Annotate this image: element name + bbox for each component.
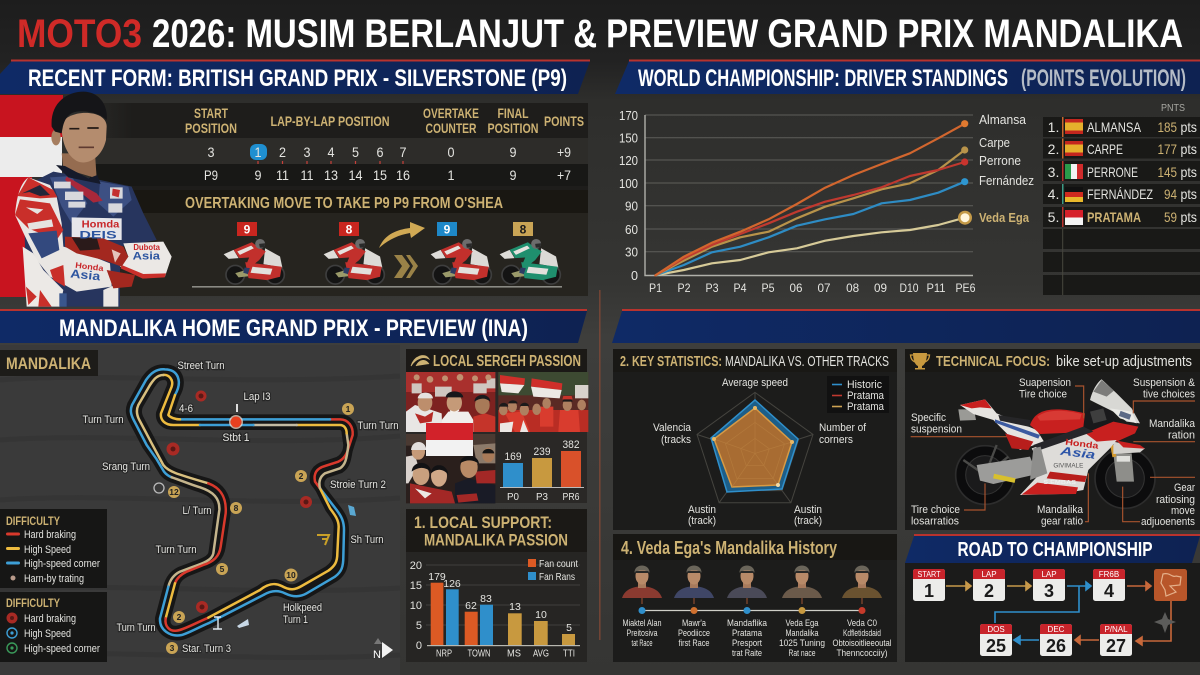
table headers: OVERTAKE: [423, 105, 479, 121]
overtaking heading: OVERTAKING MOVE TO TAKE P9 P9 FROM O'SHEA: [185, 195, 503, 212]
callout labels: Tire choice: [1019, 388, 1067, 400]
line chart: points evolution: P2: [678, 281, 691, 295]
callout labels: Mandalika: [1149, 418, 1196, 430]
row: Carpe: [1048, 138, 1197, 158]
row 2 values: 9: [510, 167, 517, 183]
series labels: Perrone: [979, 153, 1021, 168]
callout labels: Specific: [911, 412, 946, 424]
start marker: [229, 404, 243, 429]
legend: difficulty lines: High Speed: [24, 544, 71, 556]
panel: key statistics radar: [613, 349, 897, 530]
table headers: FINAL: [498, 105, 529, 121]
table headers: POINTS: [544, 113, 584, 129]
bike illustration: S.EMBAS: [1043, 480, 1076, 486]
row 2 values: 11: [300, 167, 314, 183]
row: Pratama: 59: [1164, 209, 1177, 225]
turn number badges: 10: [286, 570, 296, 580]
radar labels: (track): [688, 515, 716, 527]
panel: local support chart: 5: [566, 622, 572, 634]
turn number badges: 1: [346, 404, 351, 414]
track labels: Turn 1: [283, 614, 308, 626]
line chart: points evolution: P3: [706, 281, 719, 295]
radar labels: Valencia: [653, 422, 692, 434]
series lines: [656, 218, 965, 275]
panel: local support chart: 126: [443, 578, 461, 590]
panel: local support chart: MS: [507, 648, 521, 660]
row: Almansa: 1.: [1048, 119, 1059, 135]
icon: indonesian flag: [426, 423, 473, 456]
panel: local support chart: TOWN: [468, 648, 490, 660]
chart legend: Fan Rans: [539, 571, 575, 583]
panel: local support chart: 13: [509, 601, 521, 613]
line chart: points evolution: 09: [874, 281, 887, 295]
icon: curved gold arrow: [379, 222, 425, 248]
row: Carpe: 2.: [1048, 141, 1059, 157]
timeline captions: first Race: [678, 638, 710, 648]
callout labels: ratiosing: [1156, 494, 1195, 506]
step: 25: DOS: [987, 625, 1005, 634]
icon: sparkle: [1154, 612, 1176, 633]
row 1 values: 4: [328, 144, 335, 160]
timeline captions: Mandalika: [786, 628, 818, 638]
chart legend: [528, 558, 578, 583]
panel: mandalika preview header: [0, 309, 587, 343]
row: Carpe: pts: [1180, 141, 1197, 157]
radar labels: (track): [794, 515, 822, 527]
radar labels: Austin: [688, 504, 716, 516]
timeline captions: Preitosiva: [626, 628, 658, 638]
arrows: [946, 582, 1171, 645]
radar labels: (tracks: [661, 434, 691, 446]
row 1 values: 5: [352, 144, 359, 160]
timeline captions: Pratama: [732, 628, 762, 638]
step: 26: 26: [1046, 636, 1066, 656]
row 2 values: 16: [396, 167, 410, 183]
radar legend: [827, 376, 889, 413]
track labels: Turn Turn: [358, 420, 398, 432]
callout labels: adjuoenents: [1141, 516, 1195, 528]
photo: fans top left: [406, 372, 495, 432]
row: Carpe: 177: [1158, 141, 1177, 157]
icon: rider portrait: Homda: [82, 220, 120, 231]
table headers: POSITION: [488, 120, 538, 136]
axis labels: 170: [619, 108, 638, 123]
step: lap 3: 3: [1044, 581, 1054, 601]
track labels: Turn Turn: [116, 622, 156, 634]
row: Pratama: [1048, 207, 1197, 227]
timeline captions: Thenncocciiy): [836, 648, 888, 658]
bike illustration: [956, 379, 1155, 508]
panel: empty right banner: [612, 309, 1200, 343]
track labels: L/ Turn: [182, 505, 212, 517]
table headers: [185, 105, 584, 136]
heading: 2. KEY STATISTICS:: [620, 353, 722, 370]
panel: local support chart: 10: [410, 600, 422, 612]
photo: fans top right: [498, 372, 588, 432]
track labels: Holkpeed: [283, 602, 322, 614]
icon: rider portrait: Asia: [70, 266, 101, 283]
icon: rider portrait: Asia: [133, 250, 161, 262]
panel: local passion photos: LOCAL SERGEH PASSION: [433, 353, 581, 370]
row: Almansa: pts: [1180, 119, 1197, 135]
panel: local support chart: 15: [410, 580, 422, 592]
panel: technical focus: [905, 349, 1200, 530]
axis labels: 0: [631, 268, 638, 283]
legend: difficulty lines: High-speed corner: [24, 558, 100, 570]
panel: local support chart: 20: [410, 560, 422, 572]
panel: local support chart: [406, 509, 587, 662]
icon: rider portrait: Honda: [75, 261, 105, 273]
row: Almansa: [1048, 117, 1197, 137]
step: lap 2: LAP: [981, 570, 997, 579]
callout labels: Tire choice: [911, 504, 960, 516]
row: Carpe: CARPE: [1087, 141, 1123, 157]
overtake sequence: 8: [520, 222, 527, 236]
north arrow: N: [373, 649, 381, 661]
track labels: Srang Turn: [102, 461, 150, 473]
row 1 values: 1: [254, 144, 262, 160]
legend: difficulty lines: Harn-by trating: [24, 573, 84, 585]
row: Perrone: 145: [1158, 164, 1177, 180]
panel: Veda Ega history: 4. Veda Ega's Mandalika History: [621, 538, 837, 558]
step: 26: DEC: [1048, 625, 1065, 634]
panel: local support chart: 62: [465, 600, 477, 612]
step: 27: [1100, 624, 1132, 656]
heading: MANDALIKA PASSION: [424, 530, 568, 550]
row: Almansa: ALMANSA: [1087, 119, 1142, 135]
heading: [620, 353, 889, 370]
turn number badges: 3: [170, 643, 175, 653]
radar chart: [697, 392, 813, 503]
track labels: Star. Turn 3: [182, 643, 231, 655]
heading: TECHNICAL FOCUS:: [936, 353, 1050, 370]
panel: local support chart: TTI: [563, 648, 575, 660]
line chart: points evolution: P4: [734, 281, 747, 295]
radar labels: [653, 377, 867, 527]
timeline captions: [622, 618, 892, 658]
heading: [414, 513, 568, 550]
panel: track map: [0, 345, 400, 675]
timeline captions: Veda C0: [847, 618, 877, 628]
step: lap 2: [973, 569, 1005, 601]
row 2 values: 14: [348, 167, 363, 183]
axis labels: 100: [619, 176, 638, 191]
callout labels: ration: [1168, 430, 1195, 442]
timeline captions: Obtoisoitlieeoutal: [832, 638, 892, 648]
panel: standings table: PNTS: [1161, 103, 1185, 114]
row: Almansa: 185: [1158, 119, 1177, 135]
track labels: [82, 360, 398, 655]
legend: difficulty icons: High-speed corner: [24, 643, 100, 655]
line chart: points evolution: P5: [762, 281, 775, 295]
icon: indonesian flag backdrop: [0, 95, 63, 297]
step: start 1: 1: [924, 581, 934, 601]
heading: MANDALIKA VS. OTHER TRACKS: [725, 353, 889, 370]
row 2 values: 9: [254, 167, 262, 183]
callout leaders: [911, 386, 1195, 522]
callout labels: losarratios: [911, 516, 959, 528]
bike illustration: Asia: [1058, 444, 1097, 462]
legend: difficulty lines: Hard braking: [24, 529, 76, 541]
turn number badges: [154, 403, 354, 654]
step: 27: 27: [1106, 636, 1126, 656]
track labels: Street Turn: [178, 360, 224, 372]
series labels: Fernández: [979, 173, 1034, 188]
icon: curved wing: [411, 355, 429, 366]
timeline captions: Veda Ega: [786, 618, 818, 628]
track labels: Sh Turn: [350, 534, 384, 546]
timeline captions: Presport: [732, 638, 762, 648]
callout labels: move: [1171, 505, 1195, 517]
radar labels: Number of: [819, 422, 867, 434]
step: 27: P/NAL: [1104, 625, 1128, 634]
axis labels: 90: [625, 198, 638, 214]
row 1 values: +9: [557, 144, 571, 160]
step: feb 4: FR6B: [1099, 570, 1119, 579]
timeline captions: Peodiicce: [678, 628, 710, 638]
overtake sequence: 8: [346, 222, 353, 236]
series labels: Carpe: [979, 135, 1010, 150]
panel: local support chart: 10: [535, 609, 547, 621]
mini bar chart: PR6: [562, 491, 580, 503]
row: Perrone: [1048, 161, 1197, 181]
step: lap 3: [1033, 569, 1065, 601]
mini bar chart: 169: [504, 451, 522, 463]
portraits: [622, 566, 882, 598]
row 1 values: [208, 144, 571, 160]
row: Fernandez: 4.: [1048, 186, 1059, 202]
radar legend: Pratama: [847, 390, 885, 402]
row 1 values: 3: [304, 144, 311, 160]
axis labels: 30: [625, 244, 638, 260]
bike illustration: Honda: [1065, 437, 1099, 451]
callout labels: suspension: [911, 424, 962, 436]
track labels: 4-6: [179, 403, 193, 415]
line chart: points evolution: D10: [900, 281, 919, 295]
overtake sequence: 9: [444, 222, 451, 236]
panel: world championship header: WORLD CHAMPIONSHIP: DRIVER STANDINGS: [638, 65, 1008, 92]
line chart: points evolution: 07: [818, 281, 831, 295]
track labels: Lap I3: [244, 391, 270, 403]
radar labels: Average speed: [722, 377, 788, 389]
step: lap 2: 2: [984, 581, 994, 601]
legend: difficulty icons: High Speed: [24, 628, 71, 640]
timeline captions: Kdfletidsdaid: [843, 628, 881, 638]
table headers: POSITION: [185, 120, 237, 136]
lap 1 highlight: [250, 144, 267, 160]
timeline: [638, 598, 866, 614]
icon: trophy: [910, 353, 930, 370]
mini bar chart: 382: [562, 439, 580, 451]
panel: recent form race table: [70, 103, 588, 296]
row 1 values: 7: [400, 144, 407, 160]
legend: difficulty icons: Hard braking: [24, 613, 76, 625]
row 2 values: 15: [373, 167, 387, 183]
row: Perrone: 3.: [1048, 164, 1059, 180]
title: MOTO3: [17, 12, 142, 56]
heading: [936, 353, 1192, 370]
row: Pratama: 5.: [1048, 209, 1059, 225]
legend: difficulty lines: [0, 509, 107, 588]
heading: Mandalika: [0, 350, 98, 376]
mini bar chart: P0: [507, 491, 519, 503]
track labels: Turn Turn: [82, 414, 124, 426]
radar legend: Historic: [847, 379, 882, 391]
row: Pratama: PRATAMA: [1087, 209, 1141, 225]
overtake sequence: 9: [244, 222, 251, 236]
timeline captions: Mandaflika: [727, 618, 767, 628]
timeline captions: Rat nace: [788, 648, 816, 658]
row 2 values: 11: [276, 167, 289, 183]
line chart: points evolution: P11: [926, 281, 946, 295]
line chart: points evolution: [619, 108, 1034, 295]
panel: local support chart: 83: [480, 593, 492, 605]
callout labels: gear ratio: [1041, 516, 1083, 528]
icon: track tile: [1154, 569, 1187, 601]
table headers: LAP-BY-LAP POSITION: [270, 113, 390, 129]
step: feb 4: [1093, 569, 1125, 601]
step: start 1: [913, 569, 945, 601]
photo: fans bottom left: [406, 434, 495, 503]
radar legend: Pratama: [847, 401, 885, 413]
step: 25: [980, 624, 1012, 656]
icon: rider portrait: Dubota: [133, 243, 161, 252]
callout labels: [911, 377, 1196, 528]
legend: difficulty icons: DIFFICULTY: [6, 596, 60, 610]
panel: local support chart: 5: [416, 620, 422, 632]
line chart: points evolution: PE6: [956, 281, 976, 295]
header band: [905, 534, 1200, 563]
axis labels: [619, 108, 638, 283]
row: Fernandez: pts: [1180, 186, 1197, 202]
row: Fernandez: FERNÁNDEZ: [1087, 186, 1153, 202]
radar labels: corners: [819, 434, 853, 446]
series labels: Veda Ega: [979, 210, 1030, 225]
turn number badges: 12: [169, 487, 179, 497]
row 1 values: 2: [279, 144, 286, 160]
step: 25: 25: [986, 636, 1006, 656]
icon: chevrons: [394, 255, 418, 278]
panel: road to championship: [905, 534, 1200, 662]
step: 26: [1040, 624, 1072, 656]
callout labels: tive choices: [1143, 388, 1195, 400]
legend: difficulty icons: [0, 592, 107, 662]
line chart: points evolution: 08: [846, 281, 859, 295]
table headers: START: [194, 105, 228, 121]
row: Perrone: pts: [1180, 164, 1197, 180]
timeline captions: Miaktel Alan: [622, 618, 662, 628]
row: Perrone: PERRONE: [1087, 164, 1138, 180]
series labels: Almansa: [979, 112, 1027, 127]
panel: local passion photos: [406, 349, 588, 503]
mini bar chart: 239: [534, 446, 550, 458]
icon: rider portrait: DEIS: [79, 230, 117, 242]
track icons: [166, 390, 356, 629]
row 2 values: 13: [324, 167, 338, 183]
panel: Veda Ega history: [613, 534, 897, 662]
track labels: Stbt 1: [222, 432, 250, 444]
track labels: Stroie Turn 2: [330, 479, 386, 491]
heading: Mandalika: MANDALIKA: [6, 354, 91, 373]
bars: [427, 583, 580, 646]
timeline captions: trat Raite: [732, 648, 762, 658]
axis labels: 150: [619, 130, 638, 146]
callout labels: Suapension: [1019, 377, 1071, 389]
track outline: [131, 369, 353, 635]
turn number badges: 2: [299, 471, 304, 481]
radar labels: Austin: [794, 504, 822, 516]
row 2 values: +7: [557, 167, 571, 183]
mini bar chart: P3: [536, 491, 548, 503]
legend: difficulty lines: DIFFICULTY: [6, 514, 60, 528]
timeline captions: 1025 Tuning: [779, 638, 825, 648]
icon: rider portrait: [15, 92, 172, 307]
callout labels: Suspension &: [1133, 377, 1196, 389]
heading: 1. LOCAL SUPPORT:: [414, 513, 552, 532]
panel: local support chart: 179: [428, 571, 446, 583]
panel: mandalika preview header: MANDALIKA HOME GRAND PRIX - PREVIEW (INA): [59, 315, 528, 342]
turn number badges: 5: [220, 564, 225, 574]
timeline captions: Mawr'a: [682, 618, 706, 628]
row 2 values: [204, 167, 571, 183]
panel: recent form header: RECENT FORM: BRITISH GRAND PRIX - SILVERSTONE (P9): [28, 65, 567, 92]
step: lap 3: LAP: [1041, 570, 1057, 579]
callout labels: Gear: [1174, 482, 1195, 494]
row: Pratama: pts: [1180, 209, 1197, 225]
chart legend: Fan count: [539, 558, 578, 570]
table headers: COUNTER: [426, 120, 476, 136]
timeline captions: tat Race: [632, 638, 652, 648]
bike illustration: GIVIMALE: [1053, 463, 1083, 469]
mini bar chart: [500, 439, 584, 503]
row: Fernandez: [1048, 184, 1197, 204]
line chart: points evolution: 06: [790, 281, 803, 295]
axis labels: 120: [619, 153, 638, 168]
panel: local support chart: AVG: [533, 648, 549, 660]
panel: standings table: [1043, 103, 1200, 295]
track labels: Turn Turn: [156, 544, 196, 556]
panel: local support chart: NRP: [436, 648, 452, 660]
step: start 1: START: [918, 570, 941, 579]
turn number badges: 8: [234, 503, 239, 513]
line chart: points evolution: P1: [649, 281, 662, 295]
row 1 values: 3: [208, 144, 215, 160]
row 1 values: 0: [448, 144, 455, 160]
panel: local support chart: 0: [416, 640, 422, 652]
row 1 values: 9: [510, 144, 517, 160]
series labels: [979, 112, 1034, 225]
row 2 values: 1: [448, 167, 455, 183]
turn number badges: 2: [177, 612, 182, 622]
overtake sequence: [192, 222, 562, 288]
row 2 values: P9: [204, 167, 218, 183]
panel: recent form header: [0, 60, 590, 94]
row: Fernandez: 94: [1164, 186, 1177, 202]
axis labels: 60: [625, 222, 638, 237]
callout labels: Mandalika: [1037, 504, 1084, 516]
north arrow: [373, 638, 393, 661]
step: feb 4: 4: [1104, 581, 1114, 601]
row 1 values: 6: [376, 144, 384, 160]
